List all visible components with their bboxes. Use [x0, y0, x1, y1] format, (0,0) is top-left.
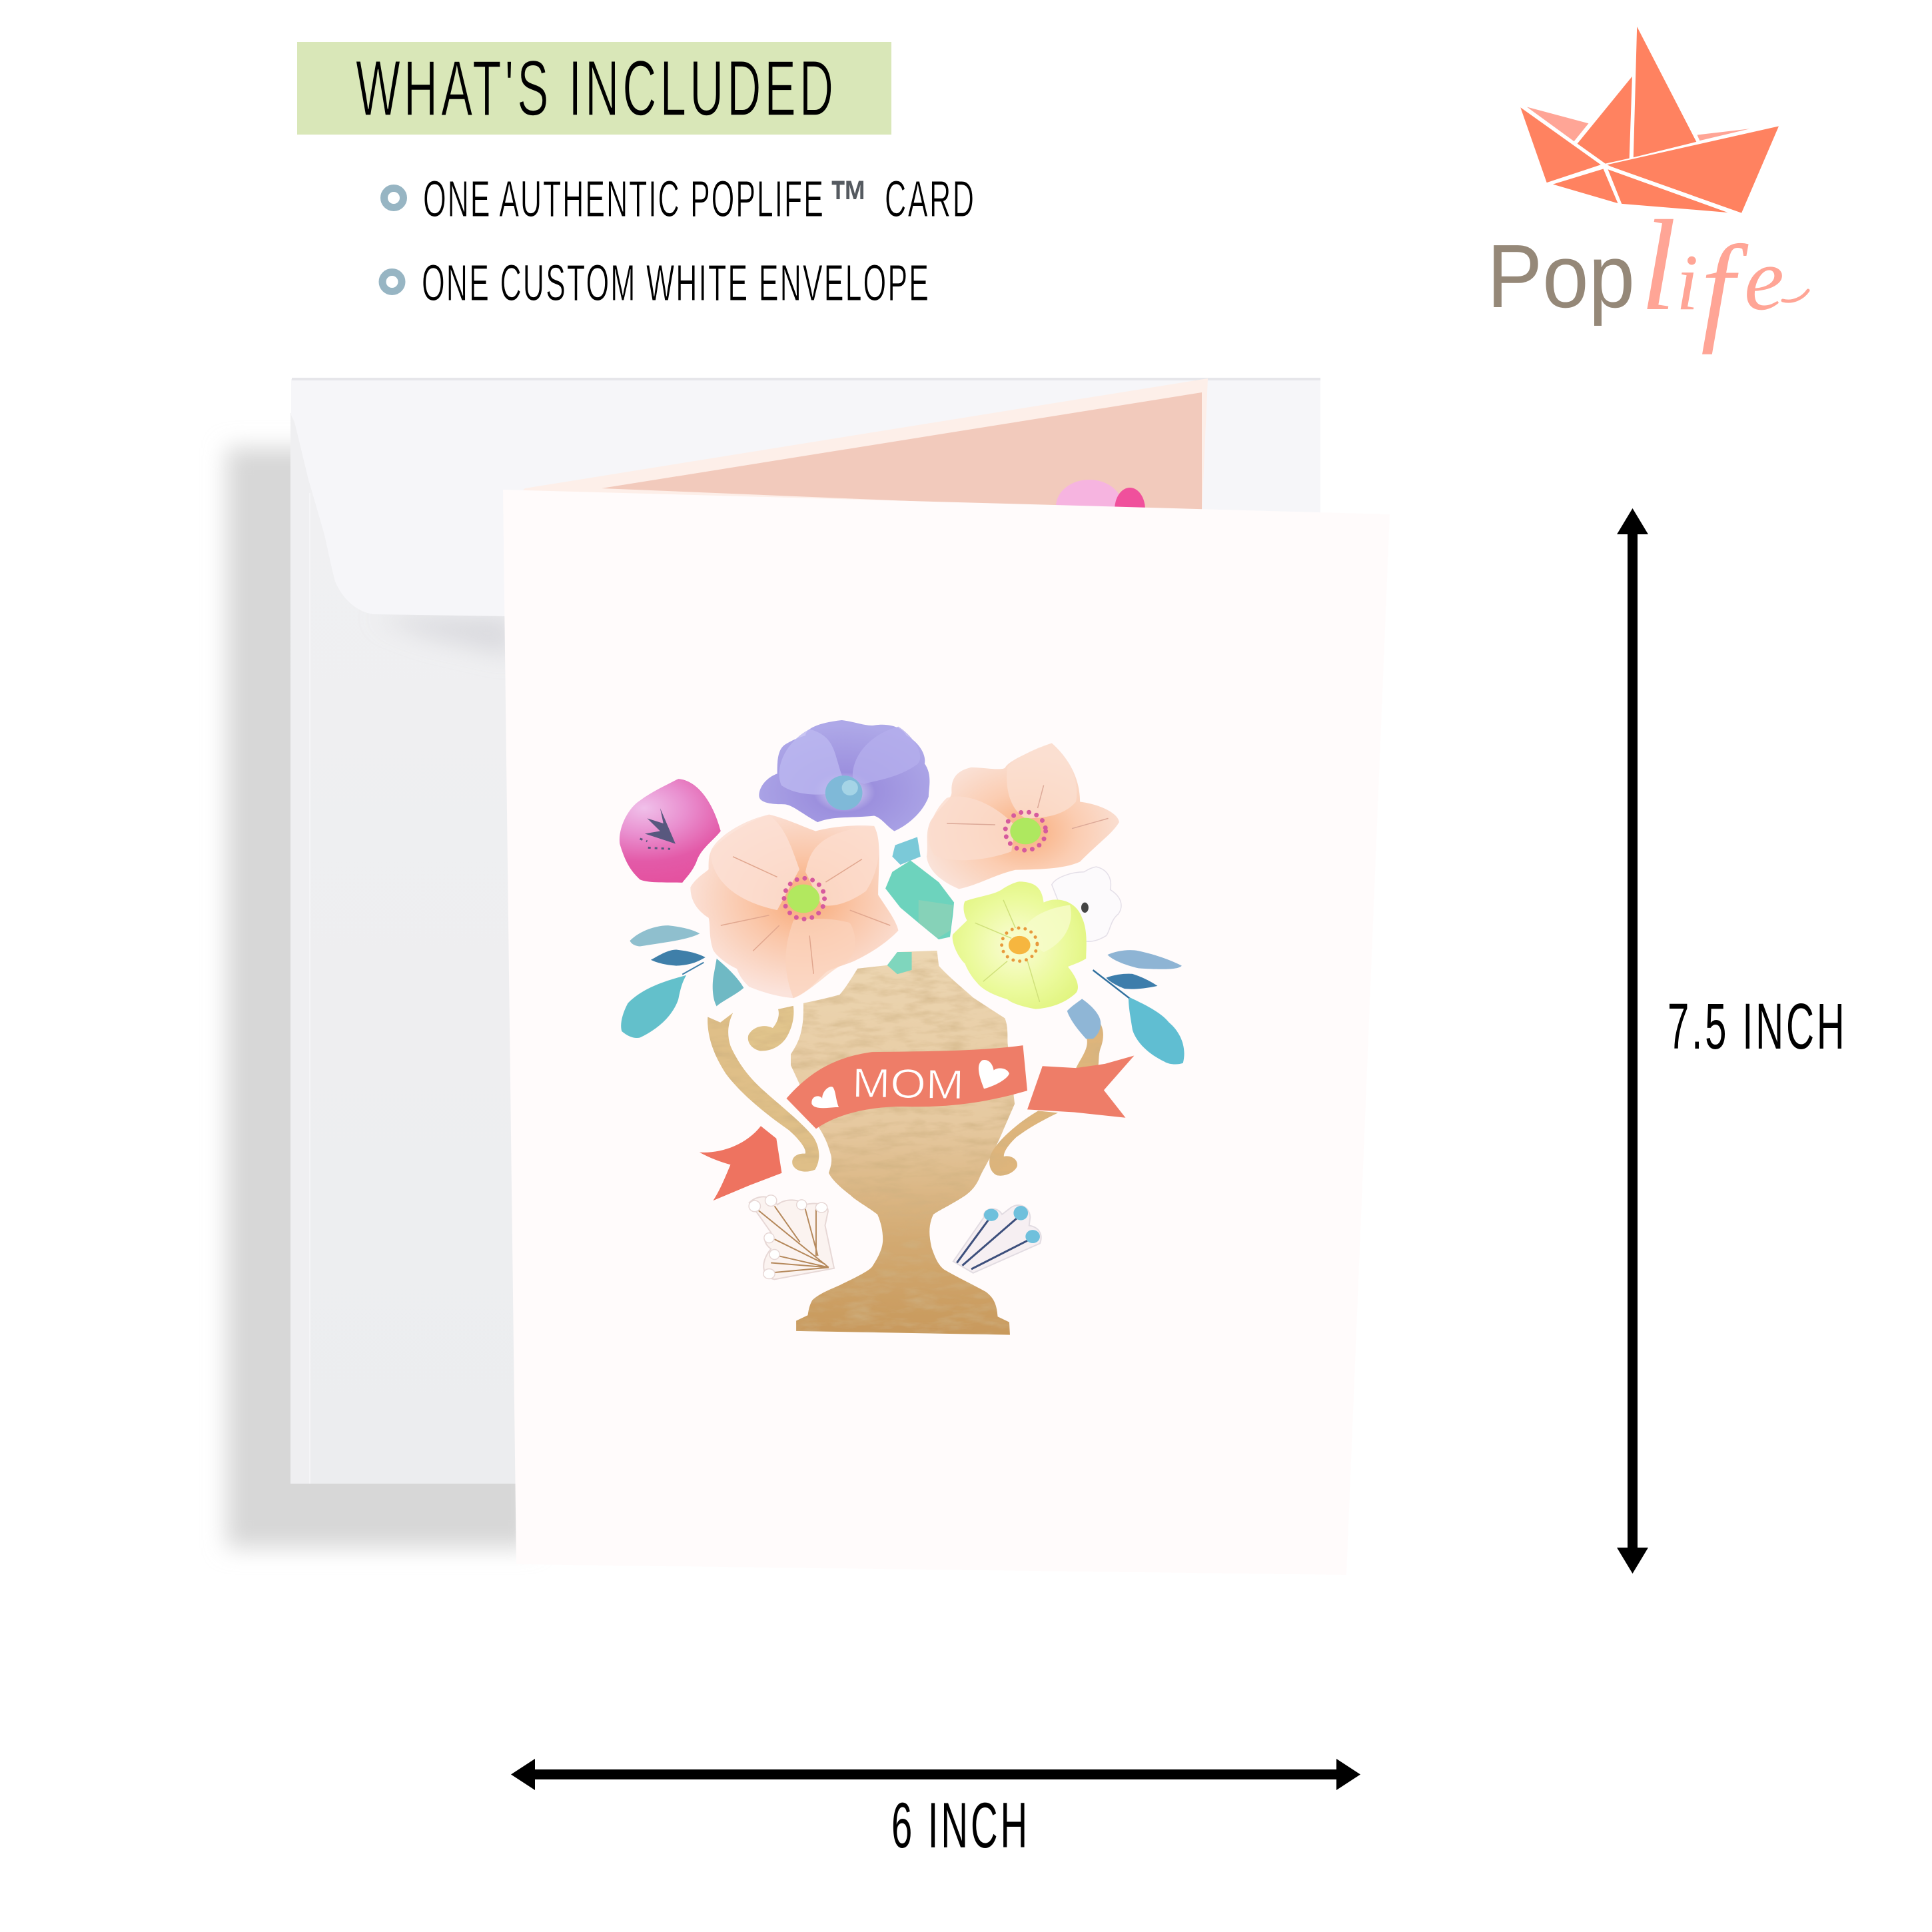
list item: card	[384, 168, 974, 234]
curl inside left handle	[748, 1006, 793, 1051]
flowers in front of trophy	[690, 815, 1121, 1039]
envelope with shadow	[227, 378, 1320, 1548]
trophy	[700, 951, 1134, 1335]
list item: envelope	[382, 254, 929, 312]
small spray: left	[749, 1195, 834, 1279]
ribbon left	[700, 1126, 781, 1201]
bouquet artwork	[620, 720, 1185, 1065]
wordmark: Pop: Pop	[1487, 226, 1635, 326]
envelope strip crease	[309, 493, 310, 1484]
icon: origami boat	[1520, 27, 1779, 213]
right handle upper	[1076, 1019, 1103, 1068]
leaf: blue over handle	[1067, 999, 1101, 1039]
flower centre	[825, 775, 863, 810]
arrow: height	[1617, 508, 1648, 1574]
heart left	[811, 1087, 839, 1108]
wordmark: life: l	[1640, 194, 1676, 338]
peeking flower	[1056, 480, 1145, 533]
item text: ONE AUTHENTIC POPLIFE	[423, 171, 823, 228]
wordmark: life: e	[1744, 230, 1784, 329]
envelope top edge	[292, 378, 1320, 380]
bullet ring	[382, 272, 402, 292]
trophy gold parts	[708, 951, 1103, 1335]
item text end: CARD	[885, 171, 974, 228]
logo: Poplife	[1487, 27, 1808, 355]
flower centre	[1009, 936, 1031, 954]
stamen ring	[1005, 812, 1046, 850]
label: width: 6 INCH	[891, 1789, 1027, 1861]
bullet ring	[384, 188, 404, 208]
insert pink face	[602, 392, 1202, 513]
flower: magenta	[620, 779, 721, 883]
teal leaf tip on cup	[887, 952, 912, 974]
wordmark: life: f	[1701, 221, 1749, 355]
arrow: width	[511, 1759, 1360, 1790]
envelope flap	[291, 379, 1320, 616]
envelope shadow	[227, 448, 533, 1548]
item text: ONE CUSTOM WHITE ENVELOPE	[422, 254, 929, 312]
flower: large peach	[690, 815, 898, 998]
banner	[786, 1045, 1027, 1129]
flower centre	[1010, 818, 1041, 844]
heading text: WHAT'S INCLUDED	[356, 44, 833, 132]
envelope body	[290, 413, 530, 1484]
ribbon right	[1027, 1055, 1134, 1118]
stamen ring	[784, 878, 825, 919]
leaves: left cluster	[621, 925, 743, 1038]
heading band	[297, 42, 891, 135]
insert edge	[506, 378, 1208, 513]
flourish on wordmark	[1783, 290, 1808, 301]
inner card peeking from envelope	[506, 378, 1208, 533]
left handle	[708, 1013, 819, 1172]
stamen ring	[1002, 928, 1037, 961]
label: height: 7.5 INCH	[1668, 991, 1845, 1063]
header: what's included	[297, 42, 891, 135]
right handle lower	[989, 1111, 1058, 1176]
small spray: right	[953, 1205, 1041, 1273]
envelope left strip	[290, 415, 310, 1484]
trademark: ™	[829, 168, 868, 234]
banner text: MOM: MOM	[851, 1061, 965, 1108]
wordmark: life: i	[1676, 238, 1698, 326]
flower centre	[787, 885, 819, 913]
card front	[503, 490, 1390, 1575]
leaves: centre teal	[885, 837, 954, 939]
flower: upper right peach	[927, 743, 1119, 889]
shadow under flap	[373, 616, 513, 656]
leaves: right cluster	[1093, 950, 1185, 1065]
flower: small white	[1052, 867, 1121, 941]
flower: purple	[759, 720, 929, 831]
heart right	[979, 1060, 1009, 1089]
trophy cup	[791, 951, 1015, 1335]
flower: lime	[953, 881, 1087, 1009]
